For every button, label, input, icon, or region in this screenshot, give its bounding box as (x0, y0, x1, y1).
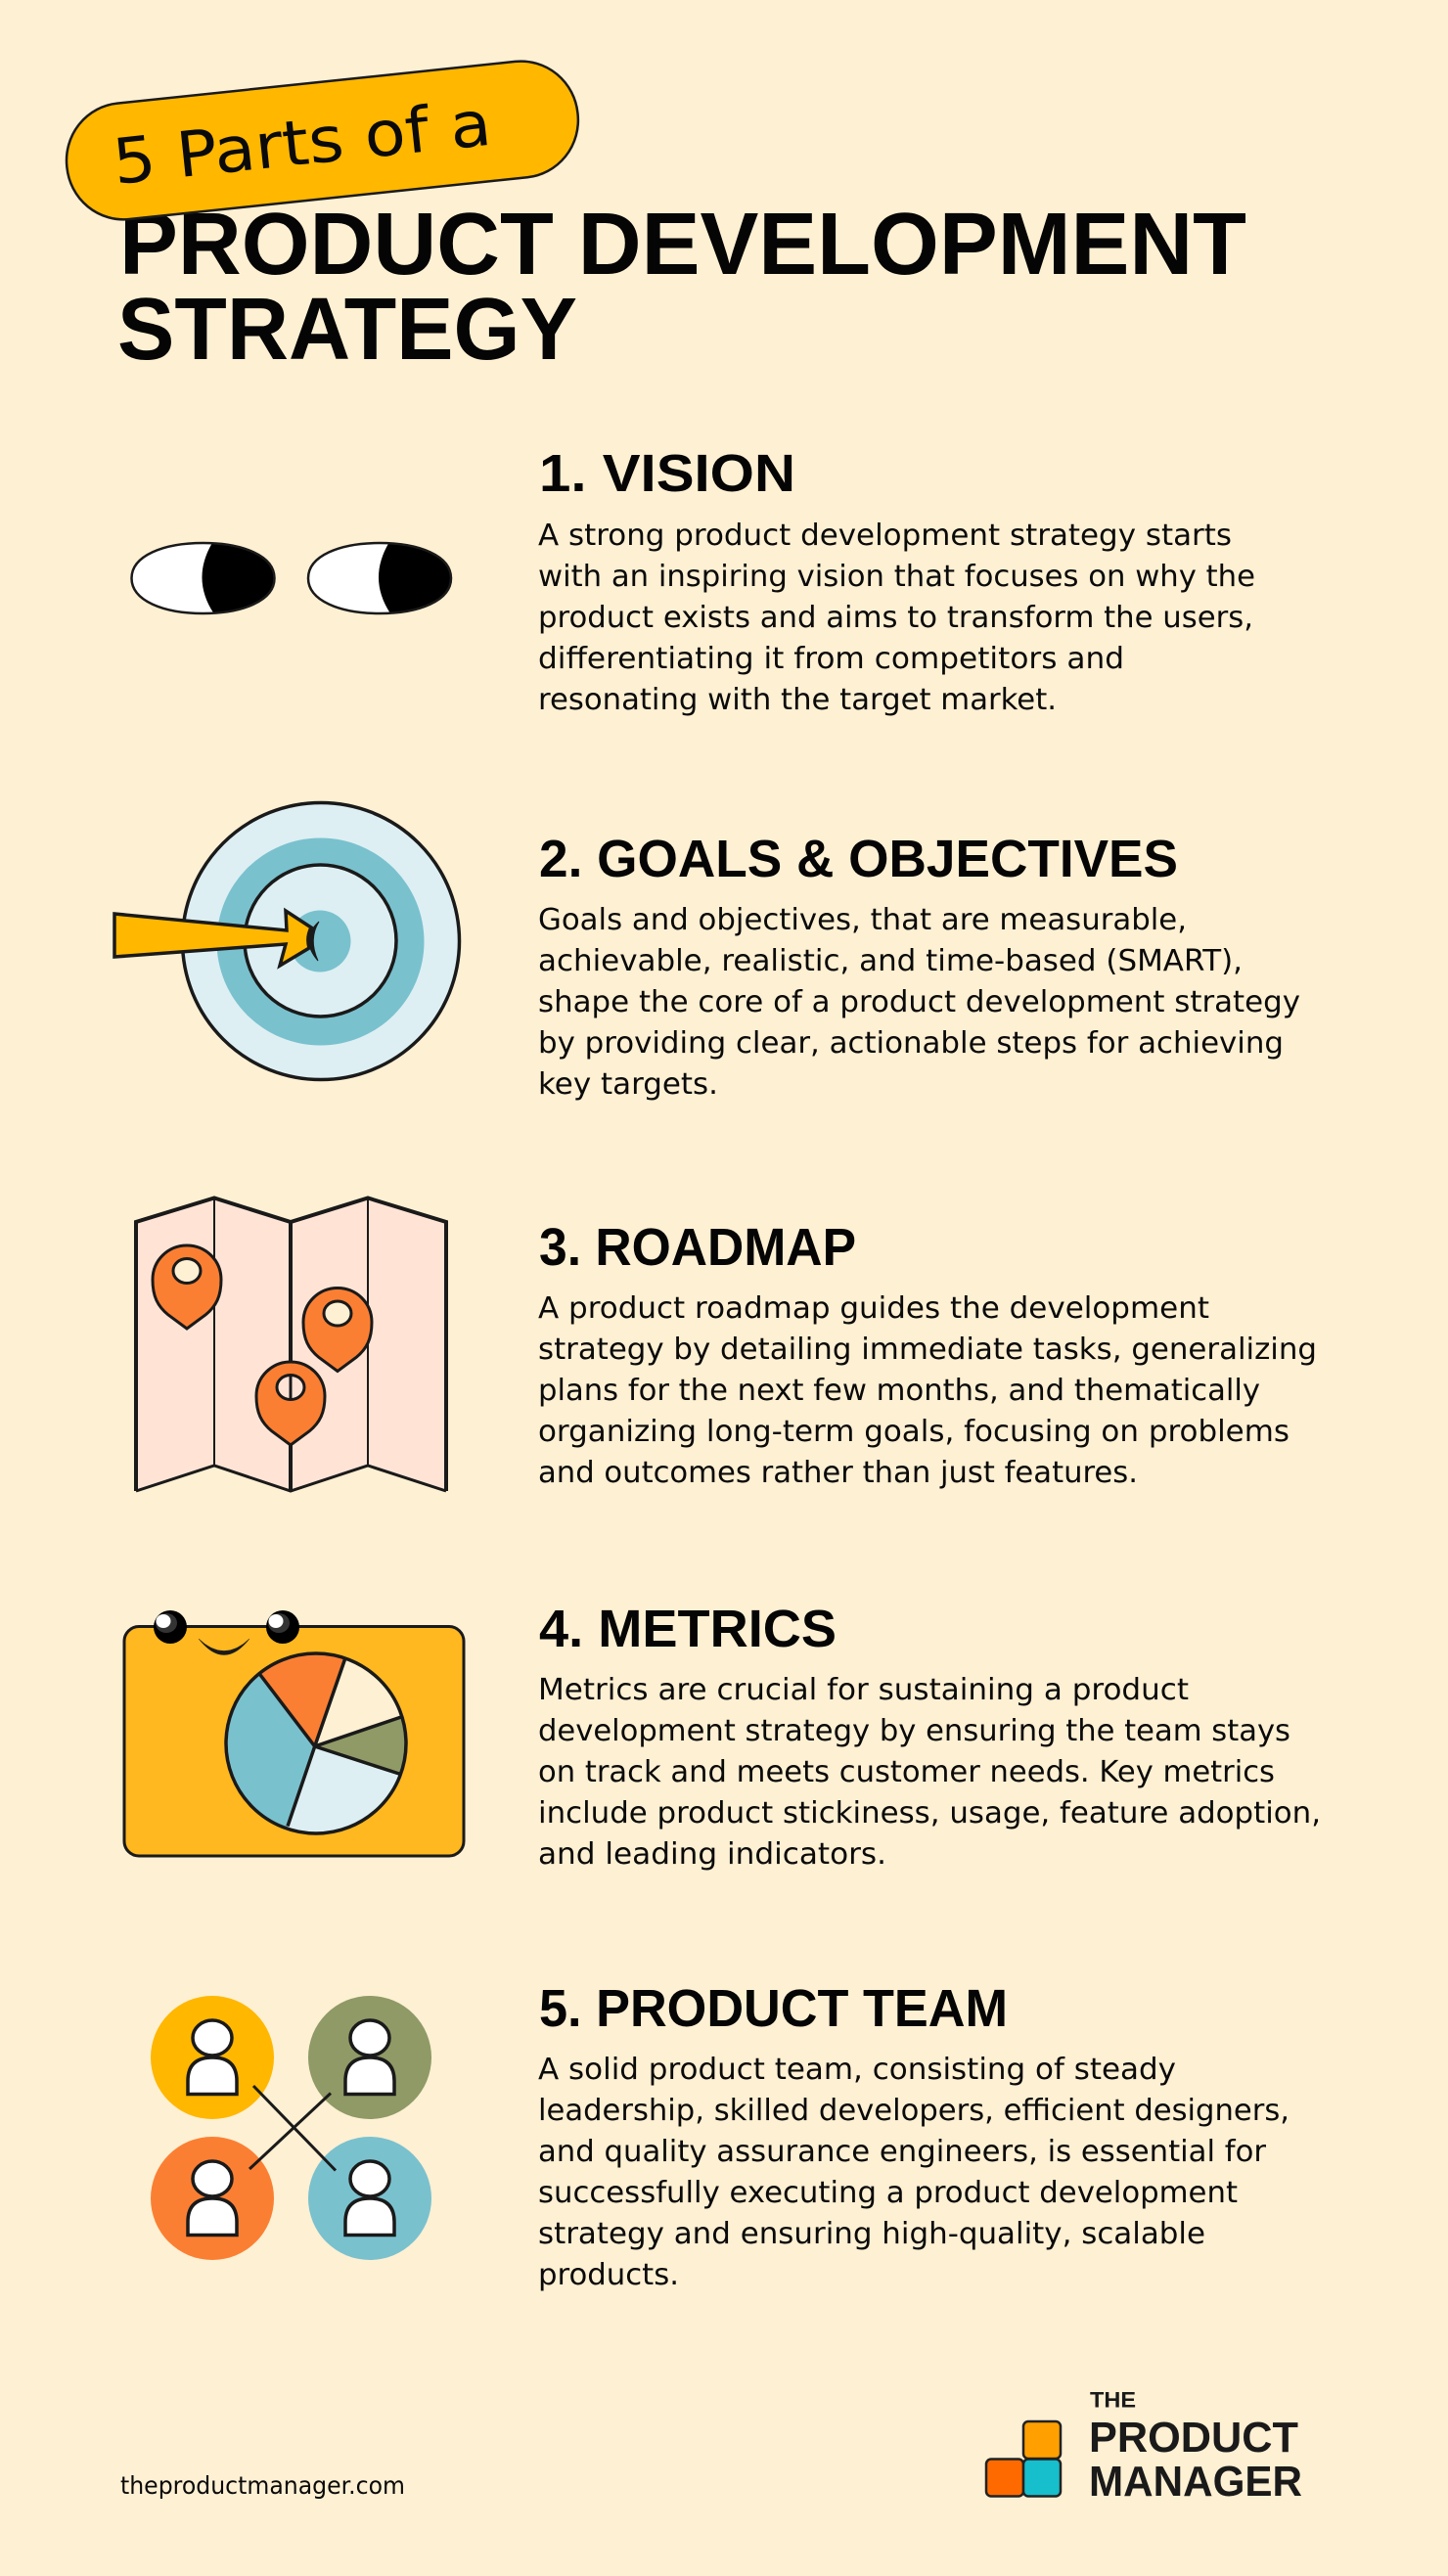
body: vision: A strong product development strategy starts (538, 519, 1232, 553)
body: product team: A solid product team, consisting of steady (538, 2053, 1176, 2087)
body: roadmap: and outcomes rather than just features. (538, 1456, 1138, 1490)
pie chart (224, 1651, 408, 1835)
section 3: roadmap (136, 1198, 1317, 1491)
person 1 (188, 2020, 237, 2094)
body: goals: Goals and objectives, that are measurable, (538, 903, 1187, 937)
body: product team: successfully executing a product development (538, 2176, 1238, 2210)
body: goals: by providing clear, actionable steps for achieving (538, 1026, 1284, 1061)
logo wordmark: THE (1090, 2387, 1136, 2413)
body: vision (538, 519, 1255, 717)
heading: 2. Goals and objectives: 2. GOALS & OBJECTIVES (539, 830, 1178, 888)
title badge: 5 Parts of a: 5 Parts of a (110, 88, 495, 200)
smile (199, 1639, 249, 1655)
person 4 (345, 2161, 394, 2235)
body: roadmap: strategy by detailing immediate tasks, generalizing (538, 1333, 1317, 1367)
section 2: goals and objectives (114, 802, 1300, 1102)
section 5: product team (151, 1979, 1290, 2292)
title (117, 196, 1246, 379)
body: metrics: include product stickiness, usage, feature adoption, (538, 1796, 1321, 1830)
heading: 1. Vision: 1. VISION (539, 444, 795, 503)
body: roadmap (538, 1291, 1317, 1490)
body: goals: shape the core of a product development strategy (538, 985, 1300, 1019)
body: goals (538, 903, 1300, 1102)
body: metrics: development strategy by ensuring the team stays (538, 1714, 1290, 1748)
person 2 (345, 2020, 394, 2094)
title badge: 5 Parts of a (61, 56, 584, 225)
logo wordmark (1089, 2387, 1302, 2506)
icon: four team members (151, 1996, 431, 2260)
heading: 3. Roadmap: 3. ROADMAP (539, 1218, 856, 1277)
body: product team: leadership, skilled developers, efficient designers, (538, 2094, 1290, 2128)
body: roadmap: A product roadmap guides the development (538, 1291, 1209, 1326)
body: roadmap: organizing long-term goals, focusing on problems (538, 1415, 1290, 1449)
body: product team: and quality assurance engineers, is essential for (538, 2135, 1266, 2169)
title: STRATEGY (117, 281, 577, 379)
body: roadmap: plans for the next few months, and thematically (538, 1374, 1260, 1408)
heading: 5. Product team: 5. PRODUCT TEAM (539, 1979, 1008, 2038)
body: product team (538, 2053, 1290, 2292)
body: vision: with an inspiring vision that focuses on why the (538, 560, 1255, 594)
logo icon: three squares (986, 2421, 1061, 2497)
body: product team: strategy and ensuring high-quality, scalable (538, 2217, 1205, 2251)
logo wordmark: PRODUCT (1089, 2414, 1298, 2462)
right eye (266, 1610, 299, 1644)
logo wordmark: MANAGER (1089, 2458, 1302, 2506)
logo: The Product Manager (986, 2387, 1302, 2506)
pin 3 (256, 1362, 325, 1445)
left eye (154, 1610, 187, 1644)
body: metrics (538, 1673, 1321, 1872)
body: vision: resonating with the target market. (538, 683, 1057, 717)
body: metrics: and leading indicators. (538, 1837, 886, 1872)
body: product team: products. (538, 2258, 679, 2292)
body: goals: achievable, realistic, and time-based (SMART), (538, 944, 1243, 978)
icon: eyes (130, 542, 452, 614)
footer url: theproductmanager.com (120, 2471, 405, 2500)
person 3 (188, 2161, 237, 2235)
left eye (130, 542, 276, 614)
icon: target with arrow (114, 802, 460, 1080)
icon: chart card with pie and face (124, 1610, 464, 1869)
body: goals: key targets. (538, 1067, 718, 1102)
body: metrics: Metrics are crucial for sustaining a product (538, 1673, 1189, 1707)
body: vision: product exists and aims to transform the users, (538, 601, 1253, 635)
section 1: vision (131, 444, 1255, 717)
title: PRODUCT DEVELOPMENT (119, 196, 1246, 294)
section 4: metrics (124, 1600, 1321, 1872)
pin 2 (303, 1288, 372, 1372)
pin 1 (153, 1245, 221, 1329)
right eye (307, 542, 452, 614)
body: metrics: on track and meets customer needs. Key metrics (538, 1755, 1275, 1789)
heading: 4. Metrics: 4. METRICS (539, 1600, 837, 1658)
icon: folded map with pins (136, 1198, 446, 1491)
body: vision: differentiating it from competitors and (538, 642, 1124, 676)
